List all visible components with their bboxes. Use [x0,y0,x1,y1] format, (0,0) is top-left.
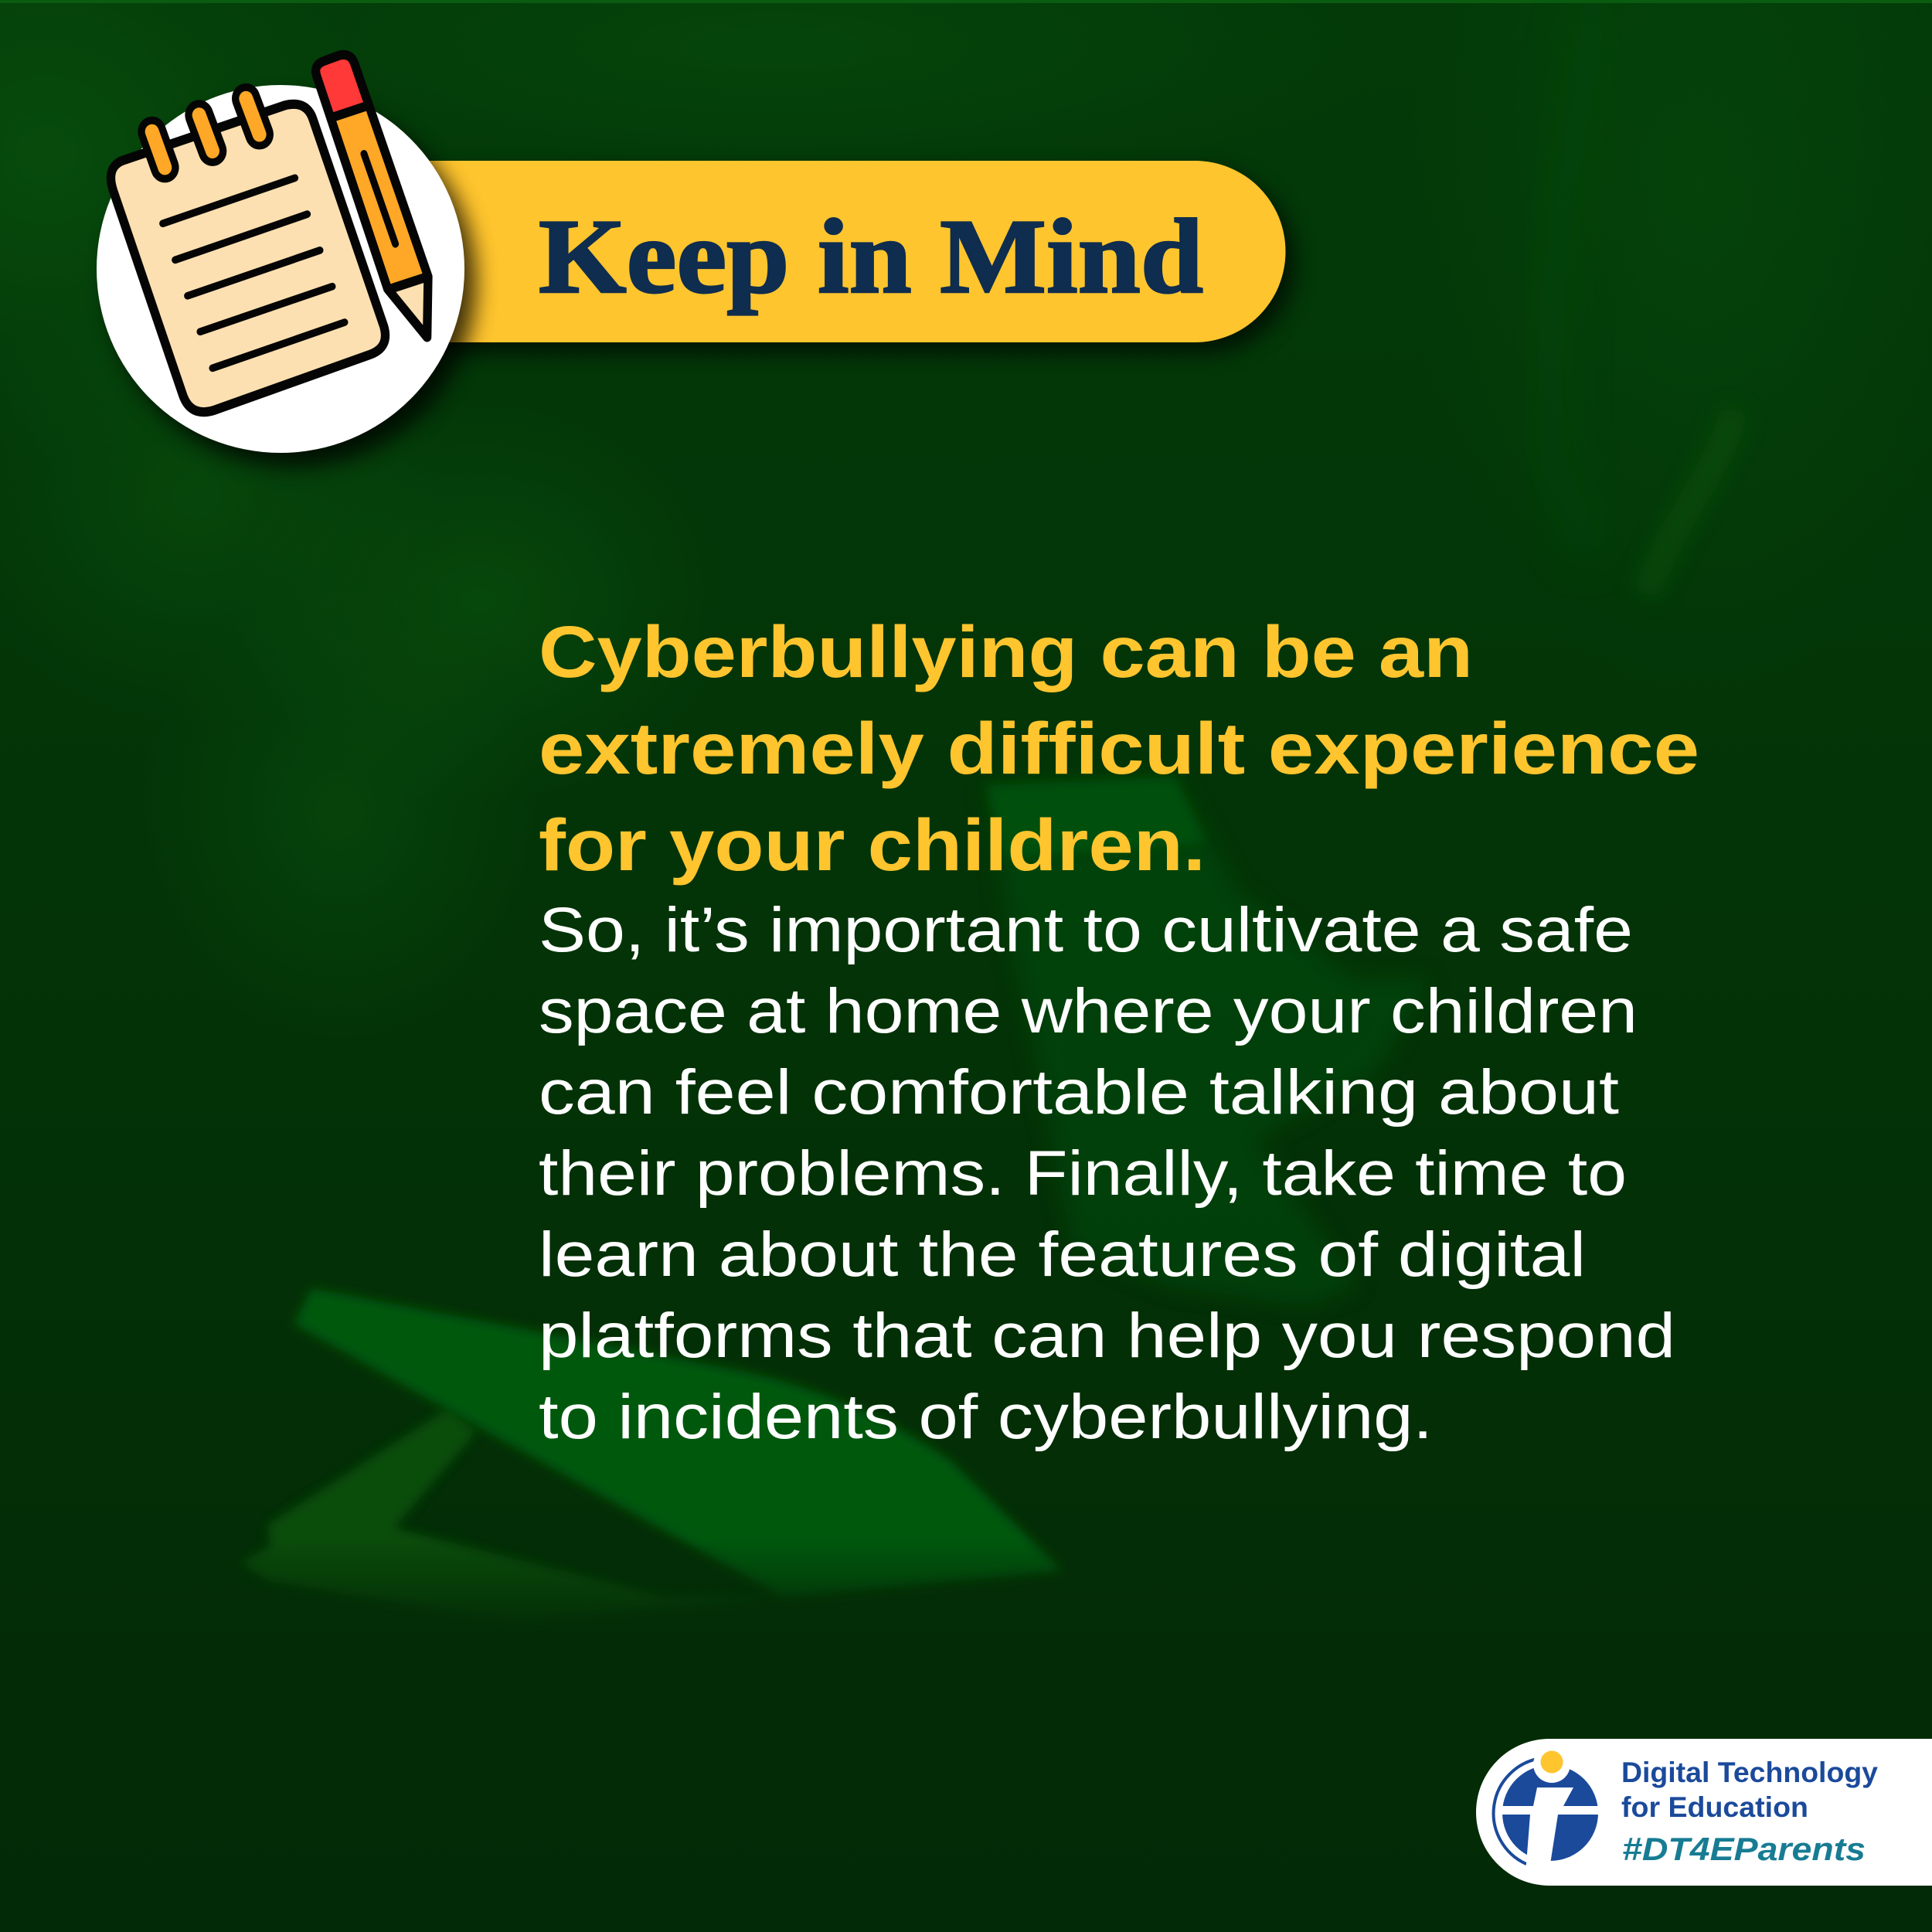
phone and hand [986,777,1431,1306]
logo text: for Education [1621,1791,1808,1823]
heading: cyberbullying statement [539,611,1699,886]
icon: notepad and pencil on white circle [97,55,476,467]
logo panel: Digital Technology for Education [1476,1739,1932,1886]
body text: space at home where your children [539,976,1638,1046]
body text [539,895,1675,1452]
body text: to incidents of cyberbullying. [539,1382,1433,1452]
body text: platforms that can help you respond [539,1301,1675,1371]
logo text: #DT4EParents [1622,1831,1866,1867]
heading: cyberbullying statement: Cyberbullying can be an [539,611,1473,693]
lower book cover [240,1409,784,1623]
body text: learn about the features of digital [539,1219,1586,1290]
upper book cover [294,1288,1063,1597]
pencil [316,55,428,337]
notepad rings [152,98,260,168]
heading: cyberbullying statement: for your children. [539,804,1206,886]
logo text: Digital Technology [1621,1757,1878,1788]
title banner [386,161,1294,353]
notepad lines [163,178,345,368]
heading: cyberbullying statement: extremely difficult experience [539,708,1699,790]
title text: Keep in Mind [539,197,1203,315]
body text: So, it’s important to cultivate a safe [539,895,1633,965]
icon: DT4E logo [1494,1746,1600,1864]
body text: their problems. Finally, take time to [539,1138,1627,1209]
logo text [1621,1757,1878,1867]
notepad page [111,104,386,412]
body text: can feel comfortable talking about [539,1057,1619,1128]
